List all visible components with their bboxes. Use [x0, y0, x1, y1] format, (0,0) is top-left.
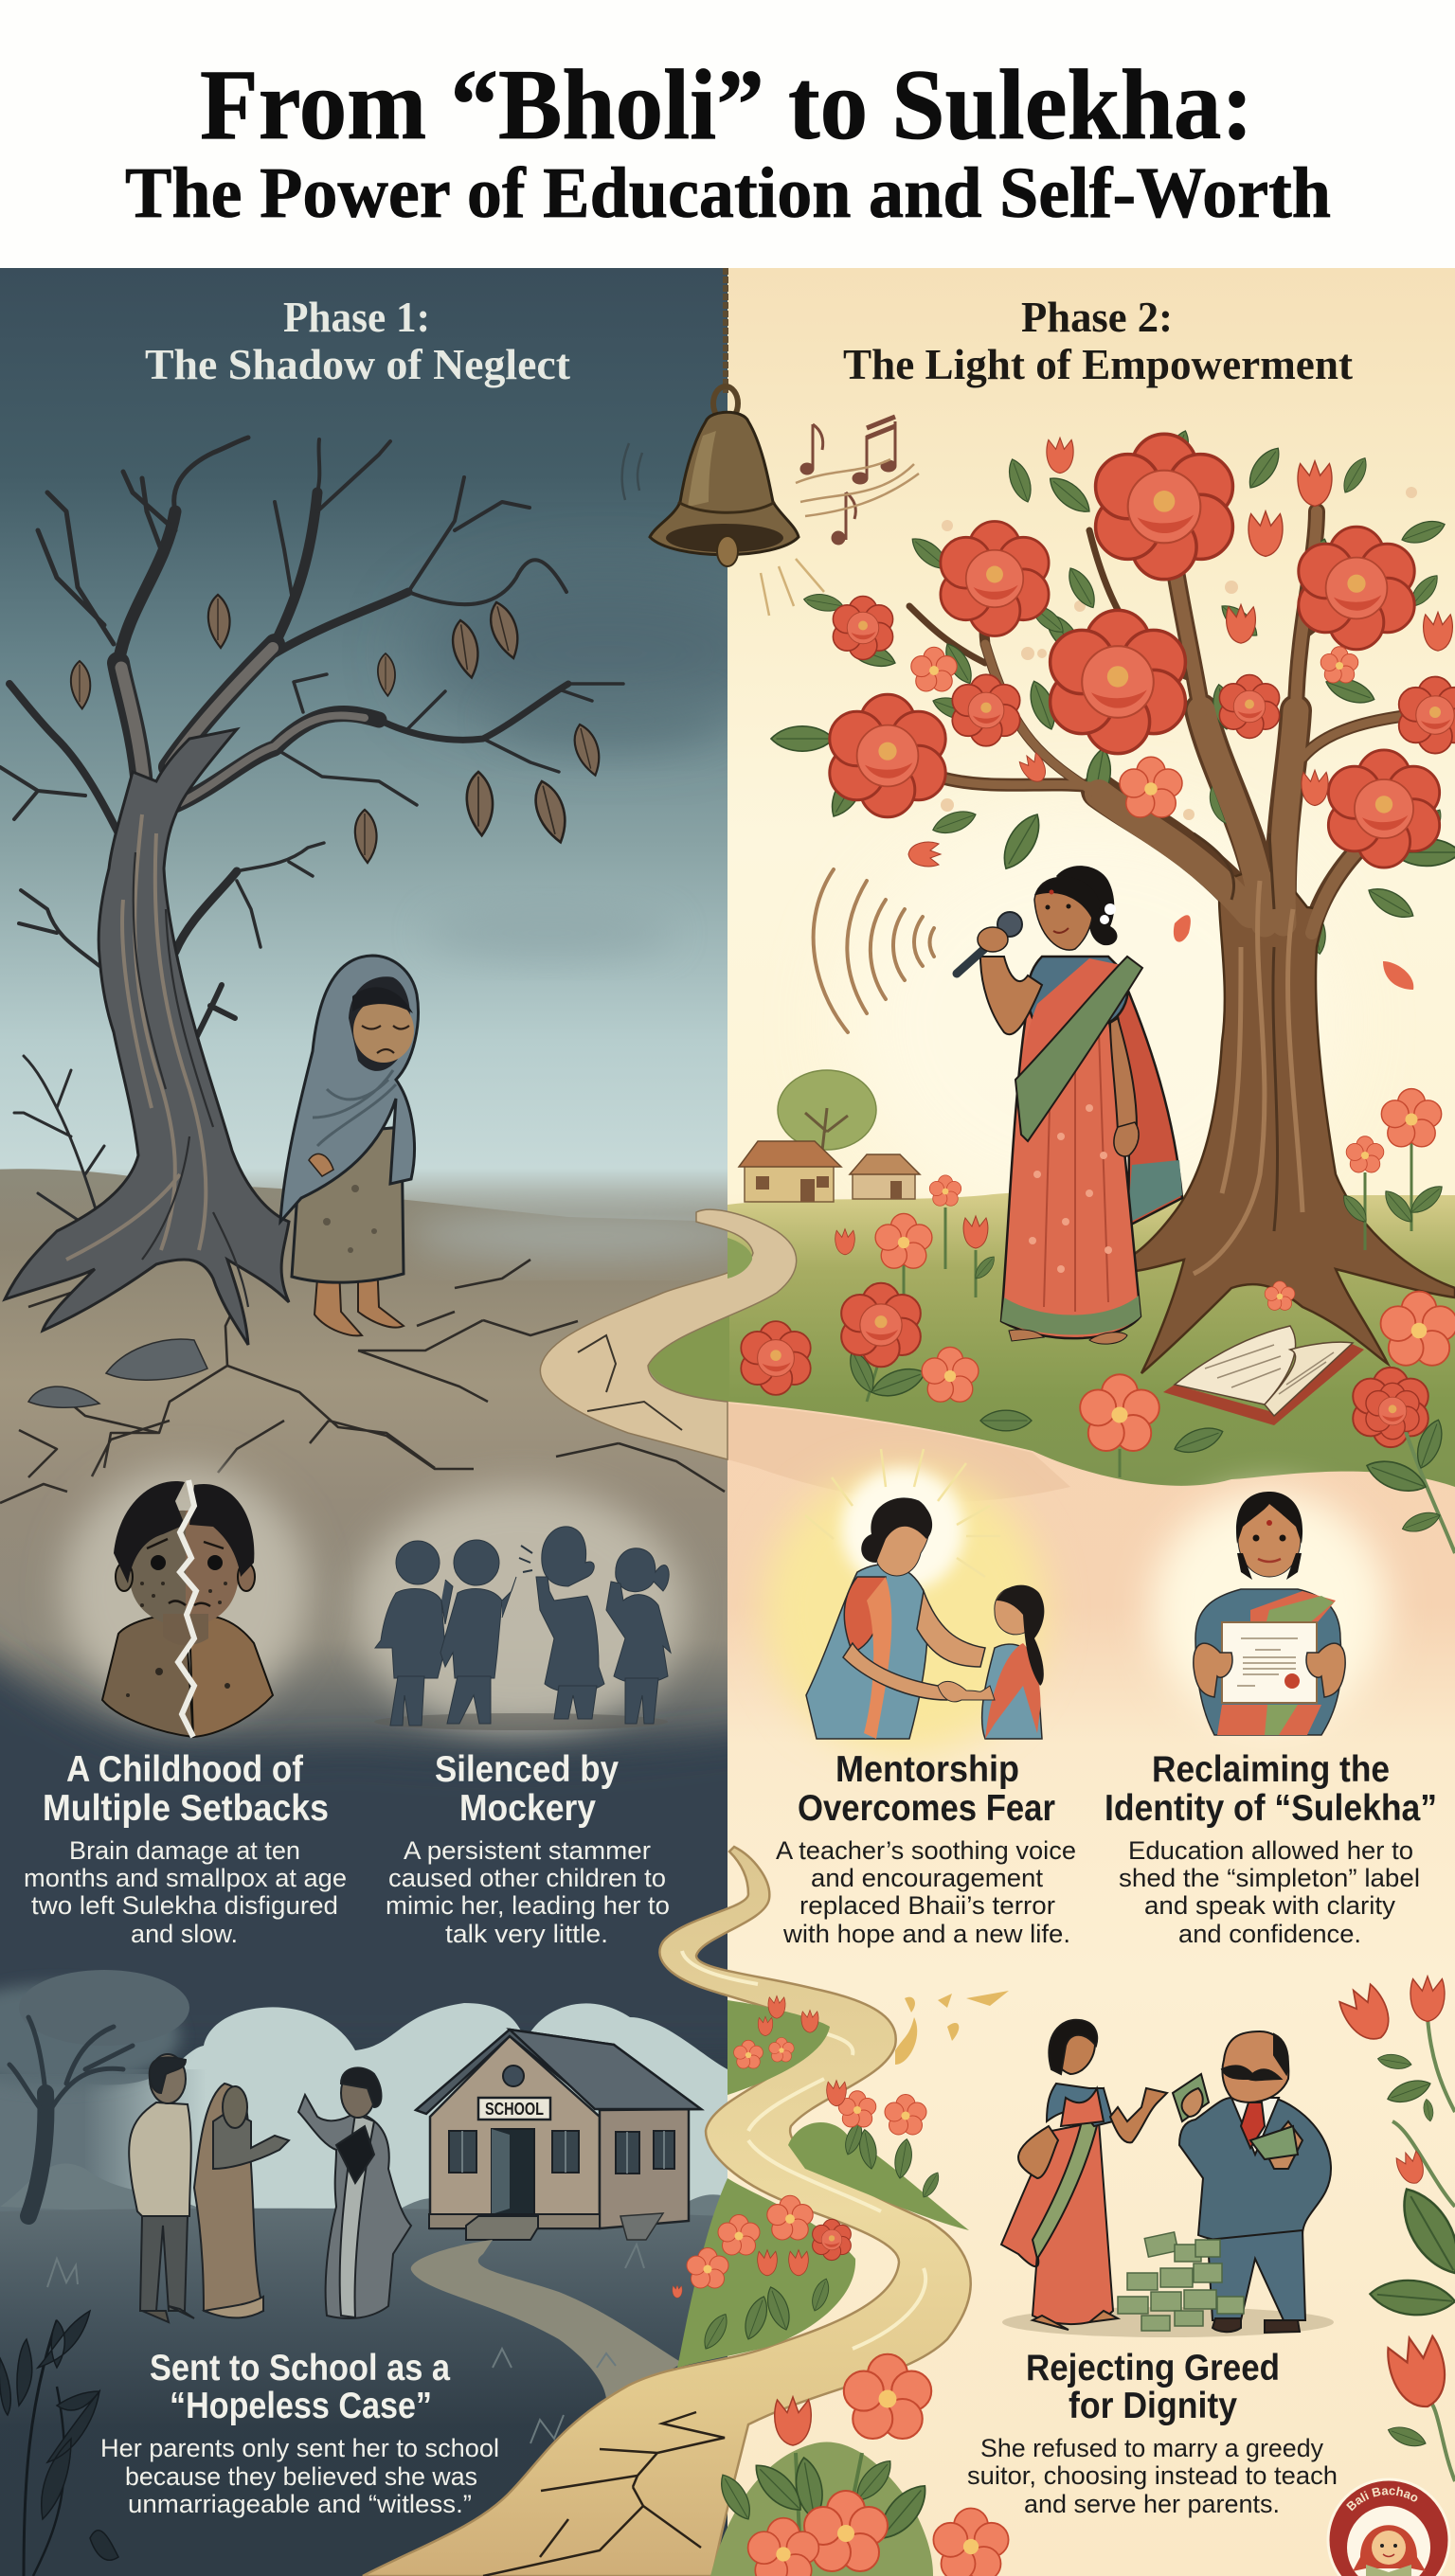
text block: A Childhood of Multiple Setbacks: and slow. — [131, 1920, 238, 1948]
text block: Rejecting Greed for Dignity: Rejecting Greed — [1026, 2348, 1280, 2388]
text block: A Childhood of Multiple Setbacks: A Childhood of — [66, 1749, 304, 1790]
cracked earth lines — [0, 1260, 725, 1503]
text block: Silenced by Mockery: Mockery — [459, 1788, 596, 1829]
open book — [1163, 1326, 1364, 1425]
green meadow patches along road — [673, 1995, 969, 2368]
scene: parents and teacher — [129, 2054, 411, 2322]
phase 2 heading: The Light of Empowerment — [843, 340, 1354, 388]
vignette: mocking children — [374, 1527, 671, 1730]
bell and music notes — [622, 268, 919, 616]
logo badge — [1326, 2478, 1451, 2576]
text block: Sent to School as a Hopeless Case — [100, 2348, 499, 2518]
panel: right background — [648, 268, 1455, 2576]
text block: A Childhood of Multiple Setbacks: two left Sulekha disfigured — [31, 1891, 338, 1920]
logo badge: Bali Bachao — [1346, 2487, 1417, 2512]
text block: Rejecting Greed for Dignity: and serve her parents. — [1024, 2490, 1280, 2518]
text block: Mentorship Overcomes Fear: A teacher’s soothing voice — [776, 1836, 1076, 1865]
text block: A Childhood of Multiple Setbacks: months and smallpox at age — [24, 1864, 347, 1892]
text block: Mentorship Overcomes Fear: replaced Bhaii’s terror — [799, 1891, 1055, 1920]
text block: Mentorship Overcomes Fear: Overcomes Fear — [798, 1788, 1055, 1829]
text block: Mentorship Overcomes Fear: and encouragement — [811, 1864, 1043, 1892]
figure: neglected girl — [280, 956, 418, 1335]
text block: Sent to School as a Hopeless Case: because they believed she was — [125, 2462, 477, 2491]
text block: Reclaiming the Identity of Sulekha: Education allowed her to — [1128, 1836, 1413, 1865]
text block: Mentorship Overcomes Fear: Mentorship — [835, 1749, 1019, 1790]
text block: Silenced by Mockery: caused other children to — [388, 1864, 666, 1892]
scene: grass tufts — [47, 2245, 644, 2443]
title: From “Bholi” to Sulekha: — [200, 49, 1253, 160]
text block: Silenced by Mockery — [386, 1749, 670, 1948]
text block: A Childhood of Multiple Setbacks — [24, 1749, 347, 1948]
scene: school building — [416, 2030, 701, 2240]
phase 2 heading: Phase 2: — [1021, 293, 1173, 341]
text block: Reclaiming the Identity of Sulekha: and confidence. — [1178, 1920, 1361, 1948]
text block: Rejecting Greed for Dignity: She refused to marry a greedy — [980, 2434, 1323, 2462]
text block: Silenced by Mockery: mimic her, leading her to — [386, 1891, 670, 1920]
text block: A Childhood of Multiple Setbacks: Brain damage at ten — [69, 1836, 300, 1865]
winding road upper — [540, 1209, 1070, 1502]
text block: Sent to School as a Hopeless Case: Her parents only sent her to school — [100, 2434, 499, 2462]
winding golden road — [363, 1847, 971, 2576]
text block: Silenced by Mockery: A persistent stammer — [404, 1836, 651, 1865]
sound waves — [814, 869, 934, 1032]
text block: Reclaiming the Identity of Sulekha: shed the “simpleton” label — [1119, 1864, 1420, 1892]
vignette: teacher and child — [763, 1449, 1047, 1752]
scene: bare tree small — [9, 2017, 133, 2216]
text block: Mentorship Overcomes Fear: with hope and a new life. — [782, 1920, 1070, 1948]
phase 2 heading — [843, 293, 1354, 388]
text block: Sent to School as a Hopeless Case: Sent to School as a — [150, 2348, 450, 2388]
foreground dark plant — [0, 2311, 118, 2576]
vignette: woman with certificate — [1151, 1492, 1388, 1735]
text block: A Childhood of Multiple Setbacks: Multiple Setbacks — [43, 1788, 329, 1829]
bottom foreground flowers — [710, 2354, 1009, 2576]
scene: school background — [0, 1970, 728, 2424]
text block: Silenced by Mockery: Silenced by — [435, 1749, 619, 1790]
meadow flowers — [741, 1089, 1455, 1477]
scene: rejecting greed figures — [1001, 2020, 1334, 2337]
phase 1 heading: The Shadow of Neglect — [145, 340, 571, 388]
text block: Reclaiming the Identity of Sulekha: and speak with clarity — [1144, 1891, 1396, 1920]
figure: Sulekha singing with microphone — [957, 866, 1182, 1344]
panel: left background sky — [0, 268, 803, 2576]
text block: Reclaiming the Identity of Sulekha: Reclaiming the — [1152, 1749, 1390, 1790]
flowering tree — [771, 428, 1455, 1373]
text block: Silenced by Mockery: talk very little. — [445, 1920, 608, 1948]
title: The Power of Education and Self-Worth — [125, 153, 1331, 233]
text block: Sent to School as a Hopeless Case: “Hopeless Case” — [170, 2386, 432, 2426]
text block: Rejecting Greed for Dignity — [967, 2348, 1338, 2518]
header background — [0, 0, 1455, 268]
text block: Rejecting Greed for Dignity: suitor, choosing instead to teach — [967, 2461, 1338, 2490]
phase 1 heading: Phase 1: — [283, 293, 430, 341]
title — [125, 49, 1331, 233]
stones — [28, 1339, 207, 1407]
phase 1 heading — [145, 293, 571, 388]
scene: dirt path to school — [411, 2240, 682, 2401]
bare tree — [0, 438, 623, 1345]
vignette: broken boy — [63, 1468, 309, 1737]
text block: Rejecting Greed for Dignity: for Dignity — [1069, 2386, 1237, 2426]
vine corner upper right — [1362, 1383, 1455, 1553]
blowing petals — [895, 1991, 1009, 2065]
bottom-right vine and tulips — [1336, 1977, 1455, 2481]
scene: school building: SCHOOL — [485, 2100, 544, 2119]
text block: Reclaiming the Identity of Sulekha — [1105, 1749, 1437, 1948]
text block: Mentorship Overcomes Fear — [776, 1749, 1076, 1948]
village houses and distant tree — [739, 1070, 920, 1202]
text block: Sent to School as a Hopeless Case: unmarriageable and “witless.” — [128, 2490, 472, 2518]
